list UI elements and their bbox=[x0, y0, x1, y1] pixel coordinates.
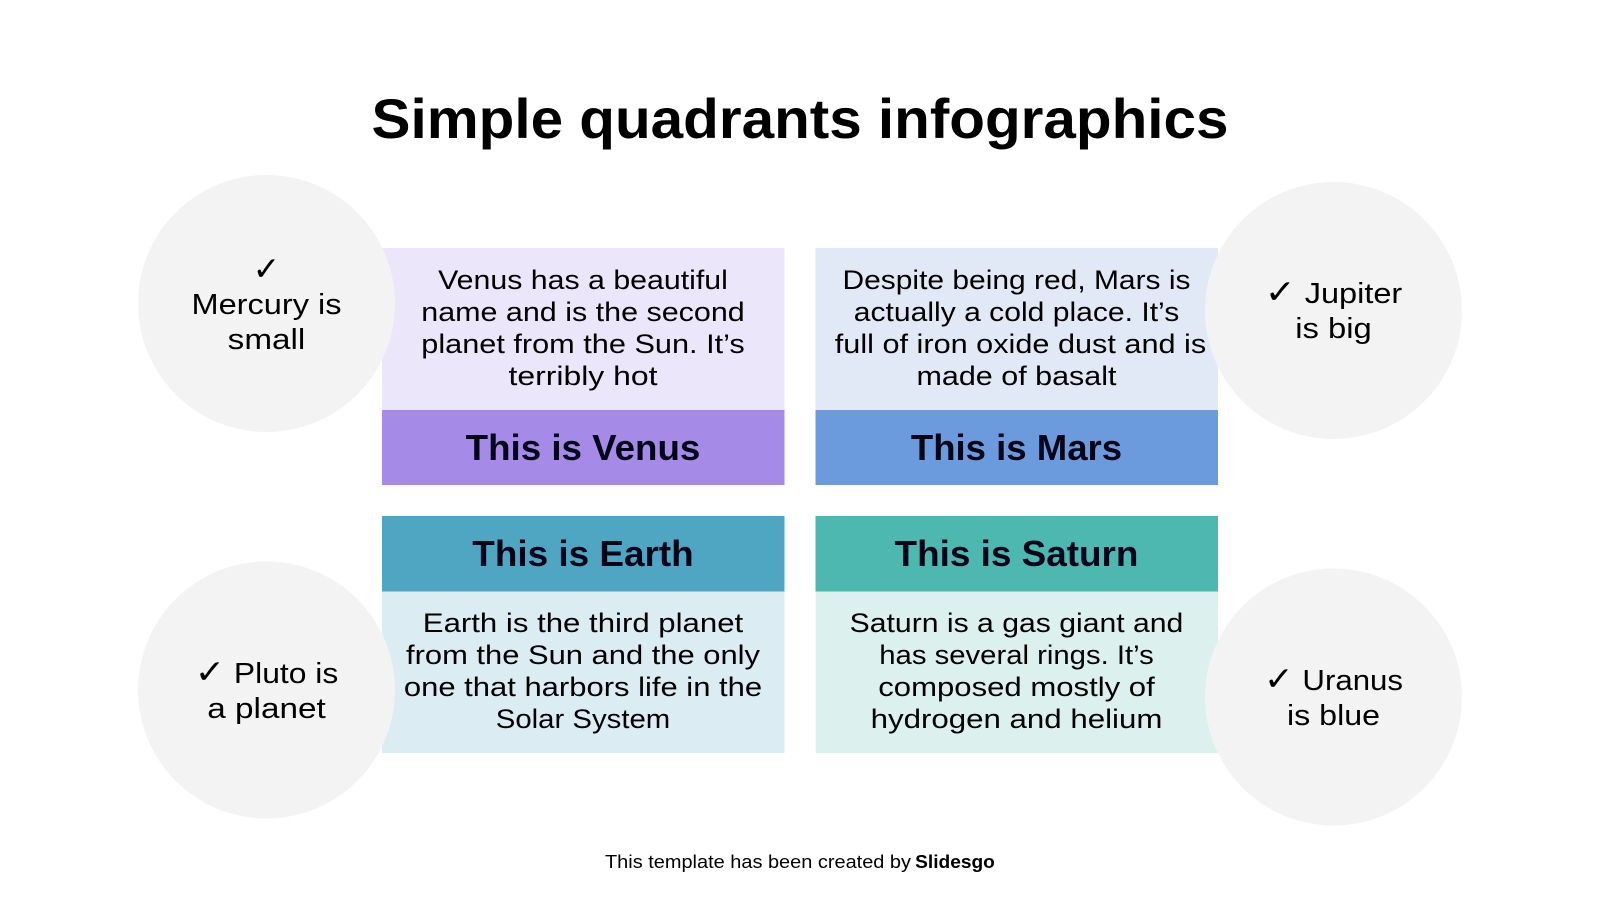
Mars heading: This is Mars bbox=[911, 427, 1122, 468]
callout: Mercury: Mercury is bbox=[192, 289, 342, 321]
panel: Venus bbox=[382, 248, 784, 485]
footer credit: Slidesgo bbox=[915, 852, 995, 872]
Mars description: actually a cold place. It’s bbox=[854, 297, 1179, 327]
Venus header bar bbox=[382, 410, 784, 485]
Saturn description: has several rings. It’s bbox=[879, 640, 1154, 670]
Venus description bbox=[421, 265, 745, 391]
Saturn description background bbox=[816, 592, 1218, 753]
Venus description: terribly hot bbox=[508, 361, 658, 391]
Mars description background bbox=[816, 248, 1218, 410]
Mars description bbox=[835, 265, 1206, 391]
Earth description bbox=[404, 608, 762, 734]
panel: Mars bbox=[816, 248, 1218, 485]
Earth description: from the Sun and the only bbox=[406, 640, 761, 670]
callout: Mercury bbox=[138, 175, 395, 432]
Earth heading: This is Earth bbox=[472, 533, 694, 574]
Venus heading: This is Venus bbox=[466, 427, 700, 468]
Saturn description: Saturn is a gas giant and bbox=[850, 608, 1183, 638]
Saturn description bbox=[850, 608, 1183, 734]
callout: Mercury: small bbox=[228, 324, 305, 356]
Mars header bar bbox=[816, 410, 1218, 485]
title: Simple quadrants infographics bbox=[372, 87, 1228, 150]
panel: Earth bbox=[382, 516, 784, 753]
callout: Jupiter: ✓ Jupiter bbox=[1265, 272, 1403, 311]
callout: Jupiter: is big bbox=[1295, 313, 1372, 345]
Venus description background bbox=[382, 248, 784, 410]
Earth description background bbox=[382, 592, 784, 753]
panel: Saturn bbox=[816, 516, 1218, 753]
Venus description: planet from the Sun. It’s bbox=[421, 329, 745, 359]
Saturn description: hydrogen and helium bbox=[871, 704, 1162, 734]
callout: Jupiter bbox=[1205, 182, 1462, 439]
callout: Mercury: ✓ bbox=[253, 249, 280, 288]
Mars description: full of iron oxide dust and is bbox=[835, 329, 1206, 359]
Earth description: Solar System bbox=[496, 704, 670, 734]
callout: Pluto bbox=[138, 562, 395, 818]
Earth description: Earth is the third planet bbox=[423, 608, 744, 638]
callout: Pluto: ✓ Pluto is bbox=[195, 652, 338, 691]
Saturn header bar bbox=[816, 516, 1218, 592]
Venus description: Venus has a beautiful bbox=[438, 265, 728, 295]
callout: Uranus: ✓ Uranus bbox=[1264, 659, 1403, 698]
callout: Uranus: is blue bbox=[1287, 700, 1380, 732]
Mars description: made of basalt bbox=[916, 361, 1117, 391]
footer credit: This template has been created by bbox=[605, 852, 911, 872]
Saturn heading: This is Saturn bbox=[895, 533, 1138, 574]
Saturn description: composed mostly of bbox=[878, 672, 1155, 702]
callout: Uranus bbox=[1205, 568, 1462, 826]
Mars description: Despite being red, Mars is bbox=[842, 265, 1190, 295]
callout: Pluto: a planet bbox=[207, 693, 326, 725]
Earth header bar bbox=[382, 516, 784, 592]
Venus description: name and is the second bbox=[421, 297, 745, 327]
Earth description: one that harbors life in the bbox=[404, 672, 762, 702]
